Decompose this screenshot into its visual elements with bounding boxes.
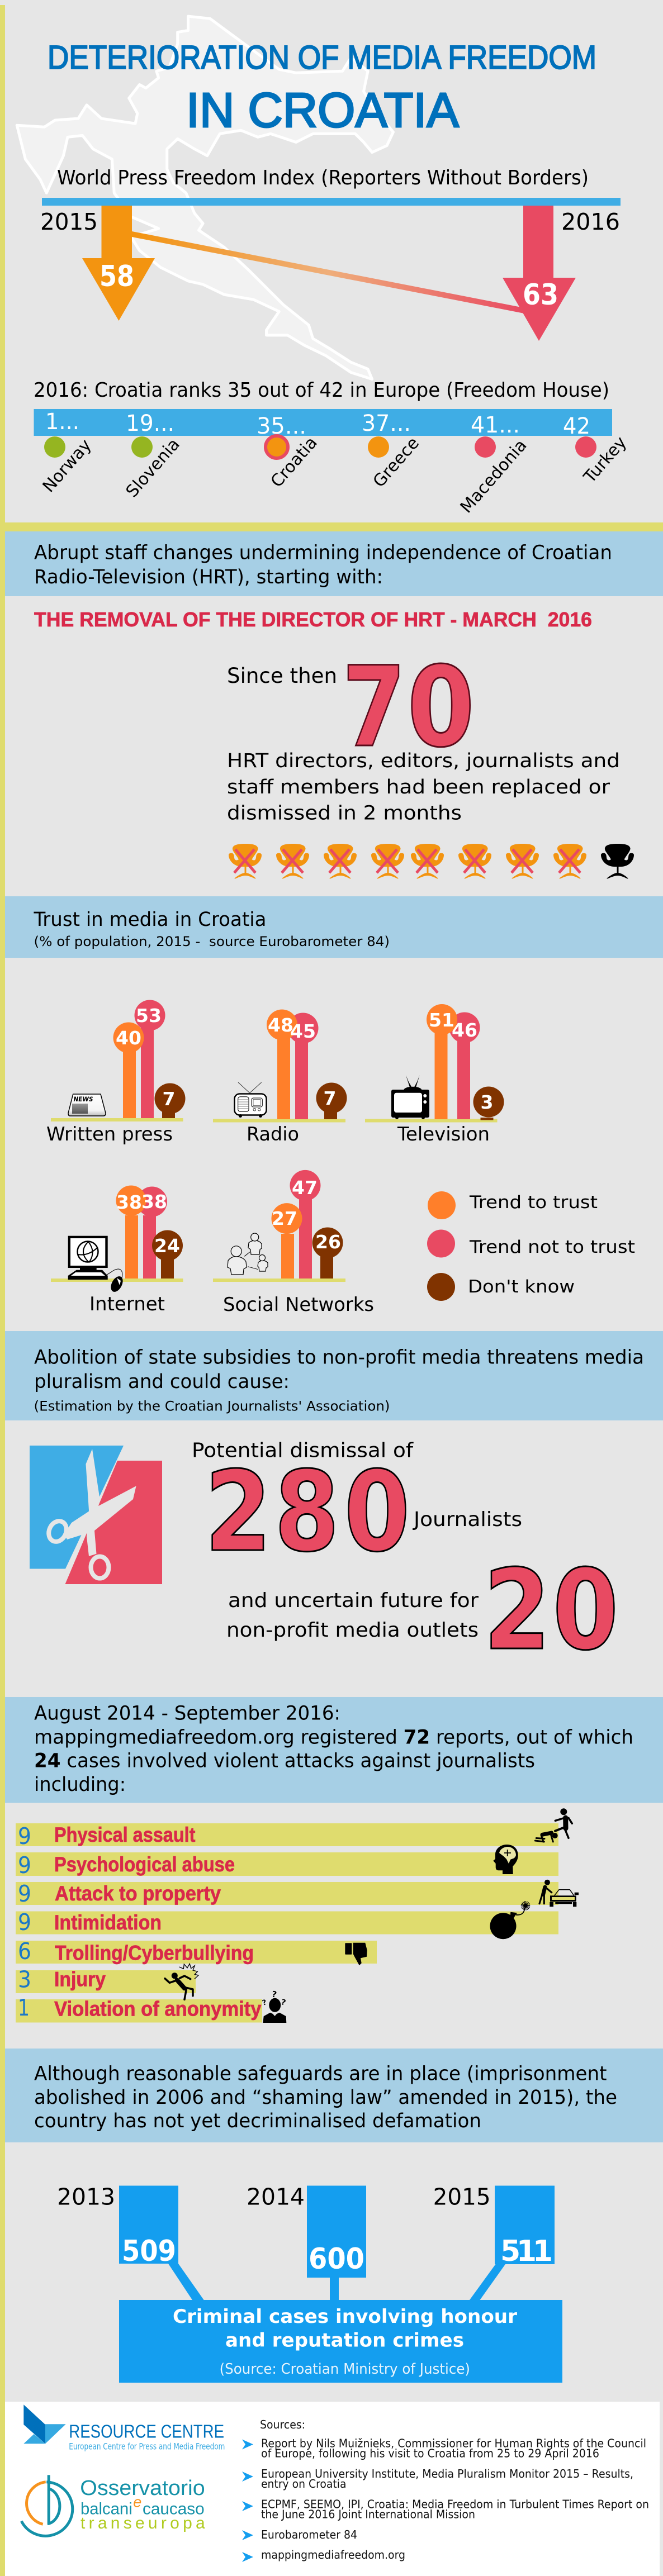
year 2014: 600: [309, 2242, 364, 2276]
icon: thumbs down: [345, 1943, 367, 1965]
chart: press freedom index 2015 vs 2016: 63: [523, 278, 558, 312]
icon: network of people: [228, 1233, 268, 1275]
chart: Freedom House rank strip: [34, 409, 631, 517]
chart: Freedom House rank strip: 19...: [126, 411, 174, 436]
panel: HRT staff changes header: [5, 531, 663, 596]
icon: anonymous person: ?: [271, 1989, 277, 2000]
chart: radio: 48: [268, 1014, 293, 1036]
sources list: Report by Nils Muižnieks, Commissioner for Human Rights of the Council: [261, 2436, 646, 2450]
panel: violent attacks header: 24 cases involved violent attacks against journalists: [34, 1750, 535, 1772]
logo: Osservatorio Balcani Caucaso Transeuropa: Osservatorio: [80, 2477, 205, 2500]
stat: 20 non-profit outlets: and uncertain future for: [228, 1589, 479, 1612]
bar: injury: Injury: [54, 1968, 106, 1990]
callout: criminal cases box: (Source: Croatian Ministry of Justice): [220, 2361, 470, 2378]
chart: written press: 40: [116, 1027, 141, 1049]
chart: social networks: [213, 1170, 374, 1316]
year 2015: 2015: [433, 2184, 491, 2211]
stat: 280 journalists: Journalists: [413, 1508, 522, 1531]
legend: Trend to trust: [469, 1192, 598, 1213]
icons: removed director chairs: [229, 844, 634, 878]
stat: 280 journalists: 0: [344, 1447, 410, 1576]
bar: attack to property: [16, 1880, 558, 1907]
sources list: of Europe, following his visit to Croatia from 25 to 29 April 2016: [261, 2447, 599, 2460]
stat: 280 journalists: Potential dismissal of: [192, 1439, 414, 1462]
panel: HRT staff changes header: Abrupt staff changes undermining independence of Croatian: [34, 542, 612, 564]
bar chart: attack types: [16, 1823, 558, 2023]
stat: 70 staff replaced: staff members had been replaced or: [227, 776, 610, 799]
logo: Osservatorio Balcani Caucaso Transeuropa: caucaso: [143, 2499, 205, 2518]
stat: 280 journalists: [192, 1439, 522, 1576]
bar: trolling: [16, 1938, 377, 1965]
bar: psychological abuse: [16, 1852, 558, 1879]
sources list: Eurobarometer 84: [261, 2528, 357, 2541]
title: IN CROATIA: [186, 83, 459, 137]
chart: Freedom House rank strip: 37...: [362, 411, 411, 436]
year 2014: 2014: [247, 2184, 305, 2211]
bar: intimidation: Intimidation: [54, 1911, 162, 1934]
logo: Osservatorio Balcani Caucaso Transeuropa: [21, 2475, 205, 2536]
chart: Freedom House rank strip: 35...: [257, 414, 306, 439]
panel: violent attacks header: August 2014 - September 2016:: [34, 1703, 340, 1725]
chart: internet: [51, 1186, 183, 1315]
legend: Trend not to trust: [469, 1237, 635, 1257]
chart: press freedom index 2015 vs 2016: 2015: [40, 208, 98, 235]
panel: violent attacks header: [5, 1697, 663, 1803]
callout: criminal cases box: [119, 2300, 562, 2383]
sources list: entry on Croatia: [261, 2477, 347, 2491]
icon: injured person: [165, 1964, 198, 1999]
stat: 280 journalists: 8: [274, 1447, 339, 1576]
stat: 20 non-profit outlets: 2: [484, 1546, 551, 1675]
stat: 70 staff replaced: Since then: [227, 664, 337, 688]
chart: criminal cases per year: [57, 2184, 562, 2383]
year 2015: 511: [500, 2235, 553, 2268]
icon: radio: [235, 1082, 266, 1118]
sources list: the June 2016 Joint International Mission: [261, 2508, 475, 2521]
chart: Freedom House rank strip: Croatia: [267, 433, 321, 491]
bar: violation of anonymity: Violation of anonymity: [54, 1997, 262, 2021]
chart: press freedom index 2015 vs 2016: 58: [100, 260, 134, 293]
bar: psychological abuse: 9: [18, 1852, 31, 1879]
chart: internet: Internet: [89, 1293, 165, 1315]
heading: removal of the director: THE REMOVAL OF THE DIRECTOR OF HRT - MARCH 2016: [34, 608, 592, 631]
logo: Resource Centre: European Centre for Press and Media Freedom: [69, 2441, 225, 2451]
chart: written press: [46, 1000, 186, 1146]
chart: Freedom House rank strip: 42: [563, 414, 590, 439]
bar: trolling: 6: [18, 1938, 31, 1965]
title: [48, 39, 596, 137]
stat: 70 staff replaced: [227, 643, 620, 825]
panel: HRT staff changes header: Radio-Television (HRT), starting with:: [34, 566, 383, 588]
heading: World Press Freedom Index: World Press Freedom Index (Reporters Without Borders): [57, 167, 589, 189]
chart: written press: 7: [163, 1088, 175, 1110]
logo: Osservatorio Balcani Caucaso Transeuropa: balcani: [80, 2499, 132, 2518]
icon: newspaper: [68, 1094, 106, 1116]
bar: trolling: Trolling/Cyberbullying: [55, 1941, 254, 1965]
stat: 70 staff replaced: 7: [342, 643, 406, 772]
stat: 20 non-profit outlets: [226, 1546, 618, 1675]
chart: press freedom index 2015 vs 2016: 2016: [561, 208, 620, 235]
icon: television: [391, 1075, 429, 1119]
sources list: European University Institute, Media Pluralism Monitor 2015 – Results,: [261, 2467, 633, 2480]
icon: man attacking car: [539, 1880, 579, 1907]
chart: social networks: 47: [292, 1177, 318, 1199]
legend: Don't know: [468, 1277, 575, 1297]
bar: violation of anonymity: 1: [18, 1994, 30, 2021]
year 2013: 509: [122, 2235, 176, 2268]
year 2015: [433, 2184, 555, 2300]
sources list: [242, 2418, 649, 2562]
sources list: Sources:: [260, 2418, 305, 2431]
chart: internet: 38: [116, 1191, 142, 1213]
chart: Freedom House rank strip: 1...: [45, 409, 79, 435]
logo: Osservatorio Balcani Caucaso Transeuropa: e: [133, 2494, 141, 2511]
panel: violent attacks header: including:: [34, 1774, 126, 1796]
bar: physical assault: [16, 1823, 558, 1850]
chart: Freedom House rank strip: 41...: [471, 412, 520, 438]
title: DETERIORATION OF MEDIA FREEDOM: [48, 39, 596, 76]
panel: trust in media header: Trust in media in Croatia: [34, 909, 266, 931]
stat: 70 staff replaced: HRT directors, editors, journalists and: [227, 750, 620, 772]
chart: television: 51: [429, 1009, 454, 1031]
chart: television: 3: [481, 1091, 493, 1113]
chart: press freedom index 2015 vs 2016: [40, 198, 621, 341]
icon: bomb: [490, 1902, 529, 1939]
bar: intimidation: [16, 1909, 558, 1936]
chart: written press: Written press: [46, 1123, 173, 1146]
icon: computer with mouse: [68, 1236, 125, 1294]
legend: [427, 1191, 635, 1301]
chart: television: [365, 1004, 504, 1146]
chart: radio: 45: [290, 1020, 316, 1042]
bar: injury: 3: [18, 1966, 31, 1993]
chart: social networks: 27: [272, 1208, 297, 1229]
icon: scissors: [30, 1446, 162, 1584]
footer panel: [5, 2402, 660, 2576]
chart: social networks: Social Networks: [223, 1294, 374, 1316]
stat: 280 journalists: 2: [205, 1447, 272, 1576]
logo: Osservatorio Balcani Caucaso Transeuropa: transeuropa: [80, 2514, 205, 2532]
chart: Freedom House rank strip: Greece: [370, 434, 423, 491]
icon: assault figures: [535, 1808, 572, 1842]
chart: social networks: 26: [315, 1231, 341, 1253]
chart: radio: [213, 1009, 347, 1146]
logo: Resource Centre: [23, 2404, 225, 2451]
chart: radio: Radio: [247, 1123, 299, 1146]
chart: Freedom House rank strip: Norway: [39, 435, 96, 496]
left yellow strip: [0, 5, 5, 2576]
panel: state subsidies header: Abolition of state subsidies to non-profit media threatens media: [34, 1347, 644, 1369]
stat: 70 staff replaced: dismissed in 2 months: [227, 802, 462, 825]
chart: Freedom House rank strip: Slovenia: [122, 435, 184, 501]
chart: television: Television: [397, 1123, 490, 1146]
bar: physical assault: 9: [18, 1823, 31, 1850]
bar: physical assault: Physical assault: [54, 1823, 196, 1846]
year 2013: 2013: [57, 2184, 115, 2211]
callout: criminal cases box: Criminal cases involving honour: [173, 2306, 517, 2328]
panel: state subsidies header: (Estimation by the Croatian Journalists' Association): [34, 1398, 390, 1414]
stat: 20 non-profit outlets: non-profit media outlets: [226, 1619, 479, 1642]
chart: internet: 38: [141, 1191, 167, 1213]
bar: violation of anonymity: [16, 1994, 262, 2023]
heading: Freedom House ranking: 2016: Croatia ranks 35 out of 42 in Europe (Freedom House): [34, 379, 609, 402]
panel: defamation header: [5, 2049, 663, 2142]
panel: state subsidies header: [5, 1331, 663, 1420]
icon: anonymous person: [262, 1989, 287, 2023]
logo: Resource Centre: RESOURCE CENTRE: [69, 2421, 224, 2441]
panel: trust in media header: (% of population, 2015 - source Eurobarometer 84): [34, 934, 390, 949]
map of Croatia: [17, 16, 393, 379]
panel: violent attacks header: mappingmediafreedom.org registered 72 reports, out of which: [34, 1726, 633, 1748]
yellow divider band: [0, 522, 663, 531]
sources list: mappingmediafreedom.org: [261, 2548, 405, 2561]
chart: written press: 53: [136, 1005, 162, 1026]
chart: television: 46: [452, 1019, 477, 1041]
chart: internet: 24: [154, 1235, 180, 1257]
bar: attack to property: Attack to property: [55, 1882, 221, 1905]
bar: intimidation: 9: [18, 1909, 31, 1936]
icon: newspaper: NEWS: [74, 1095, 93, 1103]
chart: radio: 7: [324, 1087, 336, 1109]
stat: 20 non-profit outlets: 0: [552, 1546, 618, 1675]
bar: attack to property: 9: [18, 1880, 31, 1907]
panel: state subsidies header: pluralism and could cause:: [34, 1371, 290, 1393]
bar: psychological abuse: Psychological abuse: [54, 1853, 235, 1876]
icon: head with brain: [493, 1845, 518, 1874]
bar: injury: [16, 1966, 196, 1993]
year 2014: [247, 2184, 366, 2300]
chart: Freedom House rank strip: Macedonia: [457, 436, 531, 517]
year 2013: [57, 2184, 204, 2300]
icon: anonymous person: ?: [280, 1998, 287, 2008]
panel: defamation header: abolished in 2006 and “shaming law” amended in 2015), the: [34, 2087, 617, 2109]
stat: 70 staff replaced: 0: [407, 643, 475, 772]
chart: Freedom House rank strip: Turkey: [580, 433, 631, 487]
callout: criminal cases box: and reputation crimes: [225, 2329, 464, 2351]
panel: trust in media header: [5, 896, 663, 958]
sources list: ECPMF, SEEMO, IPI, Croatia: Media Freedom in Turbulent Times Report on: [261, 2498, 649, 2511]
panel: defamation header: Although reasonable safeguards are in place (imprisonment: [34, 2062, 607, 2085]
icon: anonymous person: ?: [262, 1998, 268, 2008]
panel: defamation header: country has not yet decriminalised defamation: [34, 2110, 481, 2132]
